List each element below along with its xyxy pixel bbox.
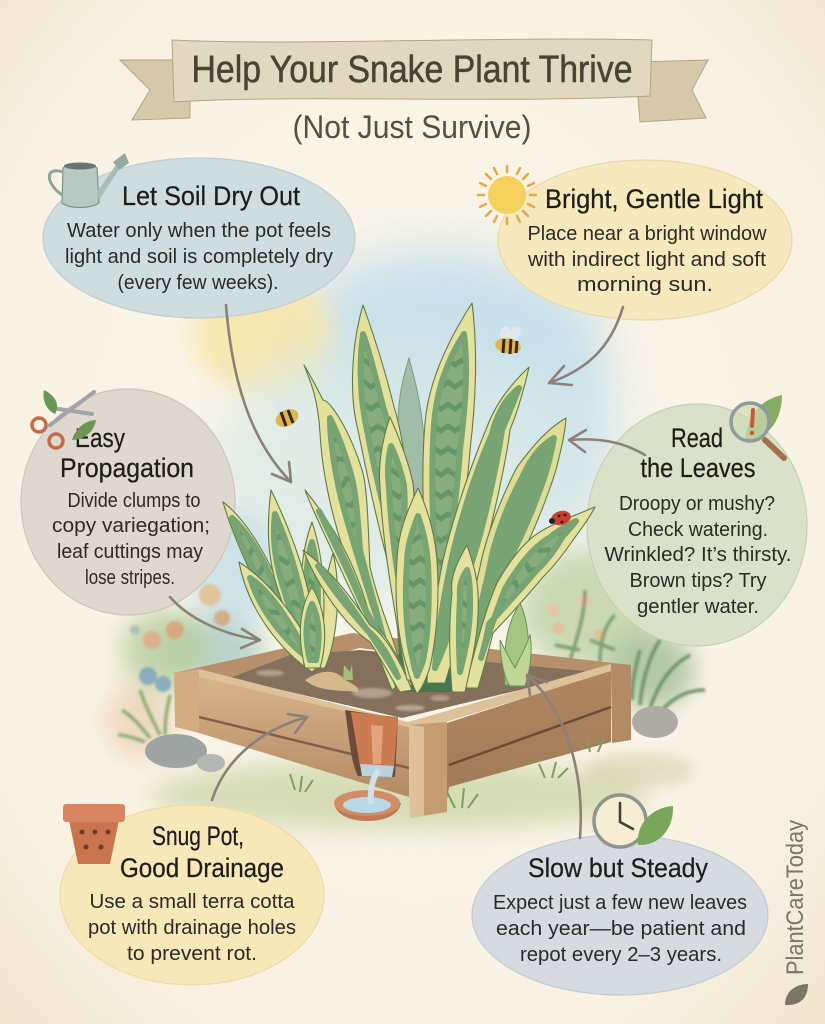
subtitle: (Not Just Survive): [292, 109, 532, 145]
new sprout: [500, 603, 531, 686]
panel: easy propagation: Divide clumps to: [68, 489, 200, 512]
leaf front centre: [396, 488, 438, 694]
icon: ladybug: [549, 509, 572, 527]
panel: easy propagation: Easy: [75, 423, 125, 453]
panel: bright gentle light: [527, 184, 767, 296]
panel: let soil dry out: Water only when the pot feels: [67, 219, 331, 242]
banner body: [172, 39, 652, 102]
panel: bright gentle light: Place near a bright window: [528, 222, 767, 245]
drainage pot with water and saucer: [334, 710, 401, 821]
icon: scissors with leaves: [32, 390, 96, 448]
panel: snug pot good drainage: pot with drainage holes: [88, 916, 296, 939]
panel: easy propagation: leaf cuttings may: [57, 540, 204, 563]
panel: bright gentle light: with indirect light and soft: [527, 248, 766, 271]
panel: read the leaves: the Leaves: [640, 453, 756, 483]
panel: snug pot good drainage: to prevent rot.: [127, 942, 257, 965]
leaf tall left: [353, 305, 418, 620]
panel: read the leaves: Wrinkled? It’s thirsty.: [604, 543, 792, 566]
panel: snug pot good drainage: Use a small terra cotta: [90, 890, 295, 913]
back grey leaf: [398, 358, 425, 580]
saucer: [334, 803, 401, 821]
icon: watering can: [49, 153, 129, 208]
leaf lower left 1: [305, 490, 412, 690]
snake plant main cluster: [303, 303, 595, 694]
dark base mass: [396, 615, 462, 692]
panel: bright gentle light: Bright, Gentle Light: [545, 184, 763, 214]
leaf lower left 2: [303, 550, 412, 692]
leaf front right small: [450, 545, 478, 692]
watercolor speech bubbles: [21, 158, 807, 995]
panel: slow but steady: [493, 853, 747, 966]
notch: [345, 710, 398, 777]
title banner: [120, 39, 708, 122]
panel: snug pot good drainage: Good Drainage: [120, 853, 284, 883]
watercolor wash behind plant: [105, 250, 695, 831]
panel: read the leaves: Read: [671, 423, 723, 453]
panel: easy propagation: Propagation: [60, 453, 194, 483]
left wall: [199, 675, 409, 797]
front rims: [199, 664, 611, 730]
title text: Help Your Snake Plant Thrive: [192, 49, 632, 91]
left post: [174, 669, 199, 733]
panel: slow but steady: repot every 2–3 years.: [520, 943, 722, 966]
watermark: PlantCareToday: [782, 820, 809, 975]
soil: [230, 650, 595, 718]
icon: bee left: [273, 399, 301, 430]
panel: let soil dry out: light and soil is completely dry: [65, 245, 334, 268]
panel: let soil dry out: (every few weeks).: [118, 271, 278, 294]
panel: snug pot good drainage: [88, 821, 296, 965]
snake plant left cluster: [223, 490, 358, 692]
panel: easy propagation: copy variegation;: [52, 514, 210, 537]
rhizome: [305, 672, 358, 692]
panel: slow but steady: Slow but Steady: [528, 853, 708, 883]
panel: read the leaves: gentler water.: [637, 595, 759, 618]
panel: let soil dry out: [65, 181, 334, 294]
leaf ladybug right: [465, 507, 595, 688]
panel: slow but steady: Expect just a few new leaves: [493, 891, 747, 914]
raised wooden garden bed: [174, 633, 631, 818]
water stream: [371, 770, 378, 804]
icon: terra cotta pot: [63, 804, 125, 864]
panel: snug pot good drainage: Snug Pot,: [152, 821, 244, 851]
leaf left: [304, 365, 405, 690]
panel: easy propagation: lose stripes.: [85, 566, 175, 589]
panel: slow but steady: each year—be patient and: [496, 917, 746, 940]
right ribbon tail: [635, 60, 708, 122]
panel: let soil dry out: Let Soil Dry Out: [122, 181, 300, 211]
panel: read the leaves: Check watering.: [628, 518, 768, 541]
rocks: [145, 706, 678, 772]
pot: [351, 712, 398, 768]
icon: sun: [478, 166, 536, 224]
panel: read the leaves: [604, 423, 792, 618]
panel: read the leaves: Droopy or mushy?: [619, 492, 775, 515]
background foliage and flowers: [118, 584, 705, 742]
back rim: [174, 633, 631, 680]
panel: read the leaves: Brown tips? Try: [630, 569, 767, 592]
centre post: [409, 722, 447, 818]
grass tufts: [290, 738, 604, 808]
left ribbon tail: [120, 60, 190, 120]
right wall: [447, 670, 611, 800]
arrows: [170, 305, 645, 838]
icon: magnifying glass with leaf: [731, 395, 784, 458]
leaf browning: [460, 418, 566, 686]
leaf tall right: [423, 303, 476, 610]
panel: easy propagation: [52, 423, 210, 589]
leaf second front: [379, 417, 420, 680]
leaf right thin: [427, 367, 529, 683]
soil highlights: [256, 670, 450, 711]
icon: bee right: [494, 324, 523, 356]
icon: clock with leaf: [594, 795, 673, 847]
right post: [611, 664, 631, 743]
panel: bright gentle light: morning sun.: [577, 273, 713, 296]
